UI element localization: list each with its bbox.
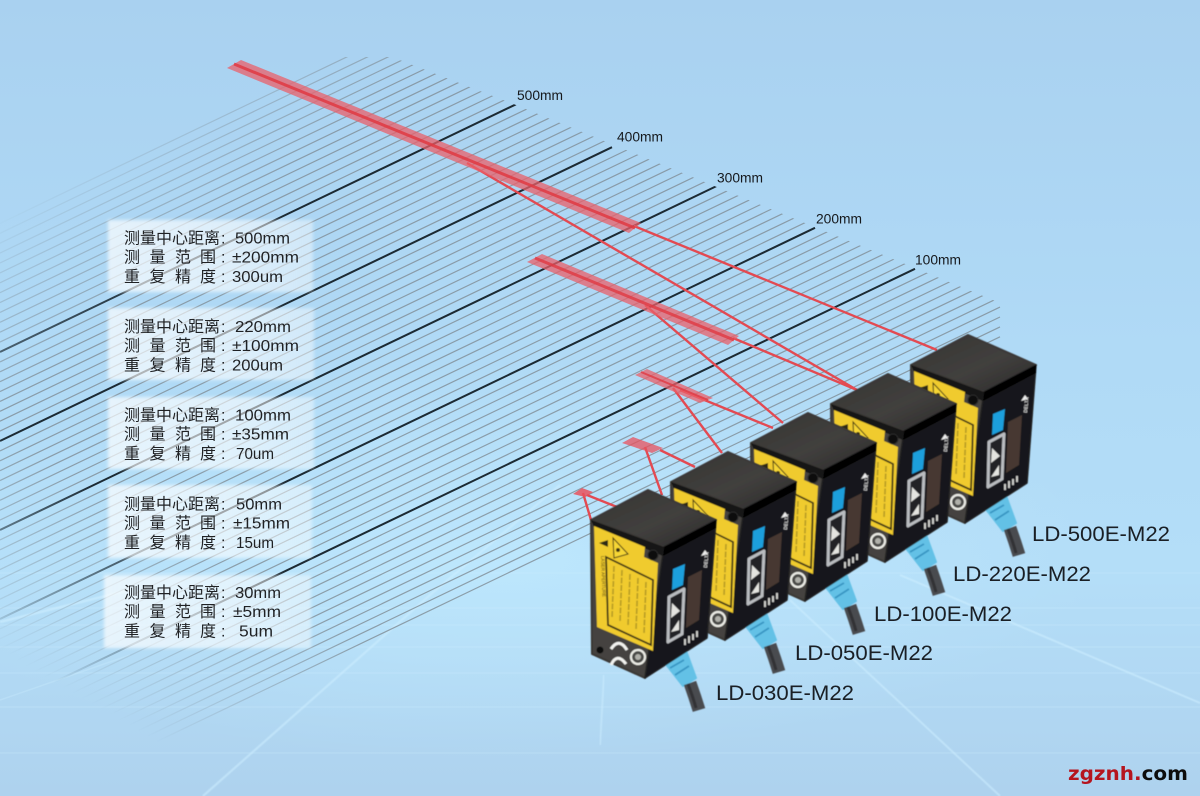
spec panel 50mm: 15um bbox=[236, 535, 274, 552]
spec panel 500mm: ±200mm bbox=[232, 250, 299, 266]
spec panel 30mm: ±5mm bbox=[233, 604, 281, 621]
sensor LD-030E-M22 bbox=[591, 490, 716, 710]
model labels bbox=[716, 523, 1170, 705]
spec panel 50mm: ±15mm bbox=[233, 516, 290, 532]
model labels: LD-050E-M22 bbox=[795, 642, 933, 665]
spec panel 100mm: : bbox=[221, 446, 225, 463]
spec panel 220mm: : bbox=[221, 358, 225, 374]
spec panel 50mm: : bbox=[221, 516, 225, 532]
spec panel 220mm: : bbox=[221, 319, 225, 336]
spec panel 50mm: : bbox=[221, 535, 225, 552]
laser band 500mm bbox=[227, 60, 641, 233]
spec panel 100mm: 测量中心距离 bbox=[124, 406, 220, 424]
laser band 50mm bbox=[622, 437, 663, 453]
spec panel 30mm: : bbox=[221, 604, 225, 621]
spec panel 100mm: 70um bbox=[236, 446, 274, 463]
spec panel 100mm: : bbox=[221, 426, 225, 444]
spec panel 30mm: : bbox=[221, 624, 225, 640]
spec panel 220mm: 200um bbox=[232, 358, 283, 374]
sensor LD-220E-M22 bbox=[831, 374, 956, 594]
sensor LD-100E-M22 bbox=[751, 413, 876, 633]
spec panel 100mm bbox=[108, 397, 314, 469]
spec panel 50mm bbox=[108, 485, 312, 558]
spec panel 220mm: ±100mm bbox=[232, 338, 299, 355]
spec panel 220mm: 测量范围 bbox=[124, 337, 216, 355]
distance labels: 500mm bbox=[517, 88, 563, 103]
measurement grid lines bbox=[0, 57, 1000, 730]
spec panel 100mm: ±35mm bbox=[232, 426, 289, 444]
spec panel 220mm: 重复精度 bbox=[124, 356, 216, 374]
spec panel 30mm: 重复精度 bbox=[124, 622, 216, 640]
distance labels: 300mm bbox=[717, 170, 763, 186]
sensor LD-050E-M22 bbox=[671, 452, 796, 672]
spec panel 100mm: 重复精度 bbox=[124, 445, 216, 463]
spec panel 500mm: 测量中心距离 bbox=[124, 230, 220, 248]
thin laser lines bbox=[467, 163, 937, 520]
spec panel 100mm: 100mm bbox=[235, 408, 291, 424]
model labels: LD-030E-M22 bbox=[716, 682, 854, 705]
watermark: zgznh.com bbox=[1068, 763, 1188, 785]
model labels: LD-500E-M22 bbox=[1032, 523, 1170, 546]
spec panel 50mm: 测量范围 bbox=[124, 514, 216, 532]
spec panel 30mm: 测量中心距离 bbox=[124, 584, 220, 602]
spec panel 30mm bbox=[104, 575, 311, 648]
spec panel 500mm bbox=[108, 220, 313, 292]
distance labels: 100mm bbox=[915, 252, 961, 268]
spec panel 50mm: 50mm bbox=[236, 496, 282, 514]
sensor LD-500E-M22 bbox=[911, 335, 1036, 555]
model labels: LD-100E-M22 bbox=[874, 603, 1012, 626]
spec panel 500mm: : bbox=[221, 250, 225, 266]
distance labels bbox=[517, 88, 961, 268]
spec panel 100mm: : bbox=[221, 408, 225, 424]
spec panel 50mm: 测量中心距离 bbox=[124, 496, 220, 514]
spec panel 220mm: 测量中心距离 bbox=[124, 318, 220, 336]
distance labels: 400mm bbox=[617, 130, 663, 144]
spec panel 50mm: : bbox=[221, 496, 225, 514]
distance labels: 200mm bbox=[816, 212, 862, 226]
spec panel 500mm: 测量范围 bbox=[124, 248, 216, 266]
model labels: LD-220E-M22 bbox=[953, 563, 1091, 586]
spec panel 500mm: 重复精度 bbox=[124, 268, 216, 286]
spec panel 30mm: 30mm bbox=[235, 585, 281, 602]
spec panel 500mm: 500mm bbox=[235, 230, 290, 248]
spec panel 30mm: 5um bbox=[239, 624, 273, 640]
spec panel 30mm: 测量范围 bbox=[124, 603, 216, 621]
spec panel 220mm bbox=[108, 308, 314, 380]
laser band 220mm bbox=[527, 254, 739, 345]
spec panel 30mm: : bbox=[221, 585, 225, 602]
spec panel 500mm: : bbox=[221, 269, 225, 286]
spec panel 500mm: : bbox=[221, 230, 225, 248]
spec panel 500mm: 300um bbox=[232, 269, 283, 286]
laser beams bbox=[227, 60, 937, 520]
spec panel 220mm: 220mm bbox=[235, 319, 291, 336]
spec panel 220mm: : bbox=[221, 338, 225, 355]
laser band 30mm bbox=[573, 488, 593, 497]
spec panel 100mm: 测量范围 bbox=[124, 426, 216, 444]
spec panel 50mm: 重复精度 bbox=[124, 534, 216, 552]
laser band 100mm bbox=[635, 369, 713, 403]
